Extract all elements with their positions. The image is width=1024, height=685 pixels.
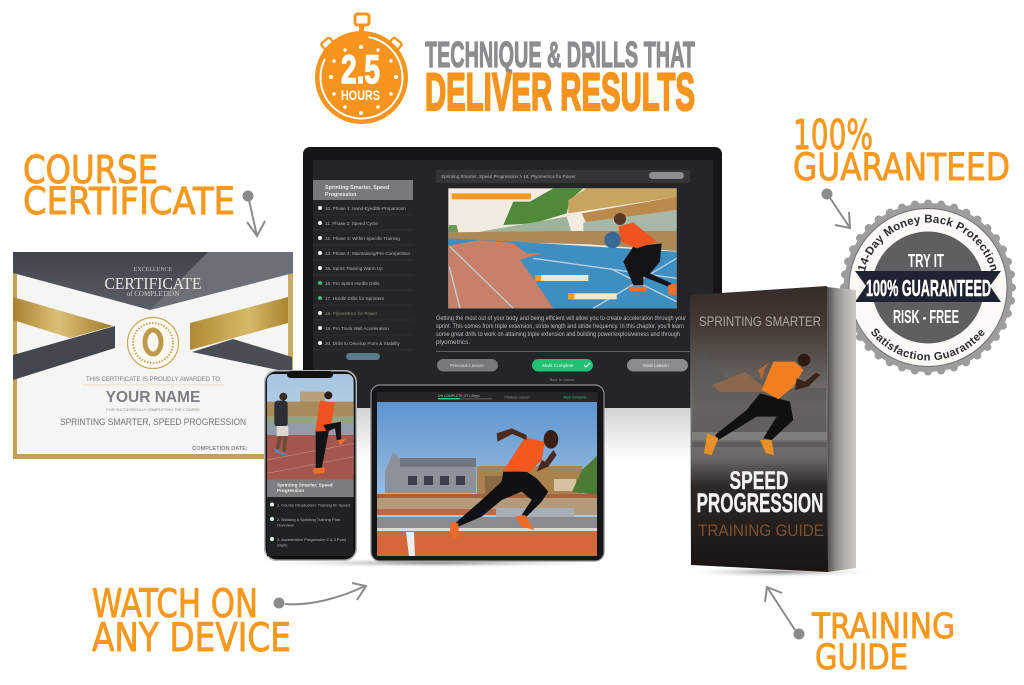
tablet top bar: [377, 392, 598, 402]
certificate body text: COMPLETION DATE:: [192, 446, 248, 452]
monitor screen: course sidebar: [313, 180, 413, 360]
monitor screen: course sidebar: 15. Sprint Training Warm Up: [325, 266, 383, 271]
monitor screen: lesson buttons: Previous Lesson: [450, 363, 484, 368]
callout: watch on any device: ANY DEVICE: [92, 616, 291, 661]
monitor: [303, 147, 722, 408]
phone photo: Progression: [277, 488, 304, 493]
certificate: [13, 252, 293, 459]
callout: course certificate: [23, 148, 235, 223]
training guide book: TRAINING GUIDE: [698, 521, 824, 540]
callout: watch on any device: [92, 582, 291, 661]
certificate heading: CERTIFICATE: [104, 274, 202, 293]
monitor screen: course sidebar: 12. Phase 3: Within Specific Training: [325, 236, 400, 241]
monitor screen: course sidebar: 18. Plyometrics for Power: [325, 311, 378, 316]
badge curved text: [858, 214, 996, 360]
sprinter figure: [450, 428, 558, 538]
guarantee badge: RISK - FREE: [893, 307, 959, 327]
monitor screen: lesson description: sprint. This comes from triple extension, stride length and stride frequency. In this chapter, you'll learn: [436, 323, 684, 330]
callout: training guide: GUIDE: [815, 638, 908, 678]
monitor screen: course sidebar: 20. Drills to Develop Form & Stability: [325, 341, 401, 346]
monitor screen: lesson buttons: Mark Complete: [542, 363, 574, 368]
arrow: to certificate: [242, 190, 265, 236]
badge curved text: 14-Day Money Back Protection: [858, 214, 996, 271]
callout: course certificate: CERTIFICATE: [23, 180, 235, 223]
monitor screen: course sidebar: Progression: [325, 192, 356, 198]
monitor screen: lesson description: some great drills to work on attaining triple extension and building power/explosiveness and through: [436, 331, 680, 338]
title: [425, 34, 695, 122]
device shadows: [245, 558, 625, 568]
certificate gold ribbons: [13, 297, 288, 350]
book cover background building: [692, 355, 827, 447]
callout: training guide: [811, 607, 955, 678]
arrow: to devices: [274, 583, 366, 608]
arrow: to badge: [822, 188, 850, 228]
certificate body text: FOR SUCCESSFULLY COMPLETING THE COURSE: [106, 407, 200, 412]
book cover sprinter: [704, 354, 820, 455]
monitor screen: lesson description: plyometrics.: [436, 339, 470, 346]
monitor screen: course sidebar: 11. Phase 2: Speed Cycle: [325, 221, 378, 226]
phone lesson list: Overview: [277, 522, 294, 528]
guarantee badge: TRY IT: [908, 251, 944, 271]
monitor screen: lesson description: Getting the most out of your body and being efficient will allow you to create acceleration through your: [436, 315, 687, 322]
certificate body text: THIS CERTIFICATE IS PROUDLY AWARDED TO: [86, 376, 220, 383]
tablet top bar: Mark Complete: [564, 396, 587, 400]
phone lesson list: [267, 497, 353, 556]
video athlete: [604, 213, 677, 295]
coach figure: [274, 393, 288, 455]
phone: [264, 370, 357, 561]
monitor screen: course sidebar: Sprinting Smarter, Speed: [325, 185, 389, 191]
certificate body text: [60, 376, 248, 452]
arrow: to book: [765, 587, 804, 640]
tablet photo: sprinter: [377, 402, 597, 556]
certificate heading: EXCELLENCE: [134, 267, 173, 273]
certificate heading: of COMPLETION: [127, 290, 179, 298]
badge curved text: Satisfaction Guarantee: [871, 328, 984, 360]
callout: 100% guaranteed: 100%: [793, 111, 873, 159]
phone lesson list: Starts: [277, 542, 287, 548]
tablet top bar: 0% COMPLETE 0/71 Steps: [438, 394, 480, 398]
guarantee badge: [840, 200, 1016, 376]
monitor screen: course sidebar: 13. Phase 4: Maintaining/Pre-Competition: [325, 251, 410, 256]
phone photo: Sprinting Smarter, Speed: [277, 483, 333, 488]
monitor screen: lesson description: [436, 315, 687, 346]
callout: training guide: TRAINING: [811, 607, 955, 647]
tablet: [371, 385, 604, 561]
tablet top bar: Previous Lesson: [504, 396, 530, 400]
certificate body text: YOUR NAME: [106, 389, 200, 406]
certificate body text: SPRINTING SMARTER, SPEED PROGRESSION: [60, 417, 246, 427]
badge banner: [855, 271, 1001, 302]
phone photo: [267, 374, 354, 497]
stopwatch icon: 2.5 hours: [314, 14, 409, 125]
stopwatch icon: 2.5 hours: HOURS: [341, 88, 380, 103]
monitor screen: course sidebar: 19. Pro Track Wall Acceleration: [325, 326, 389, 331]
title: DELIVER RESULTS: [425, 63, 695, 122]
certificate header chevron: [13, 252, 293, 310]
athlete figure: [313, 391, 347, 473]
phone lesson list: 1. Course Introduction: Training for Speed: [277, 502, 350, 508]
monitor screen: lesson buttons: [437, 359, 688, 382]
callout: course certificate: COURSE: [23, 148, 158, 192]
monitor screen: course sidebar: 16. Pro Sprint Hurdle Drills: [325, 281, 380, 286]
certificate dark ribbons: [13, 326, 292, 380]
monitor screen: lesson title bar: [436, 170, 690, 183]
phone lesson list: 2. Building a Sprinting Training Plan: [277, 517, 340, 522]
monitor screen: lesson buttons: Back to Course: [550, 378, 574, 382]
soft reflection under devices: [296, 408, 696, 460]
training guide book: [680, 286, 880, 578]
title: TECHNIQUE & DRILLS THAT: [425, 34, 695, 75]
certificate heading: [104, 267, 202, 298]
book cover title: SPRINTING SMARTER: [699, 313, 821, 329]
monitor screen: course sidebar: 17. Hurdle Drills for Sprinters: [325, 296, 385, 301]
stopwatch icon: 2.5 hours: 2.5: [341, 48, 380, 92]
phone lesson list: 3. Acceleration Progression 2 & 3 Point: [277, 537, 347, 542]
callout: 100% guaranteed: [793, 111, 1010, 189]
certificate seal: [128, 318, 178, 368]
monitor screen: lesson buttons: Next Lesson: [643, 363, 669, 368]
callout: watch on any device: WATCH ON: [92, 582, 258, 627]
monitor screen: lesson title bar: Sprinting Smarter, Speed Progression > 18. Plyometrics for Power: [441, 174, 576, 179]
training guide book: PROGRESSION: [696, 488, 824, 518]
monitor screen: training video still: [448, 188, 677, 308]
monitor screen: course sidebar: 10. Phase 1: Hand-Eyed/Bi-Preparation: [325, 206, 406, 211]
training guide book: SPEED: [730, 467, 788, 495]
